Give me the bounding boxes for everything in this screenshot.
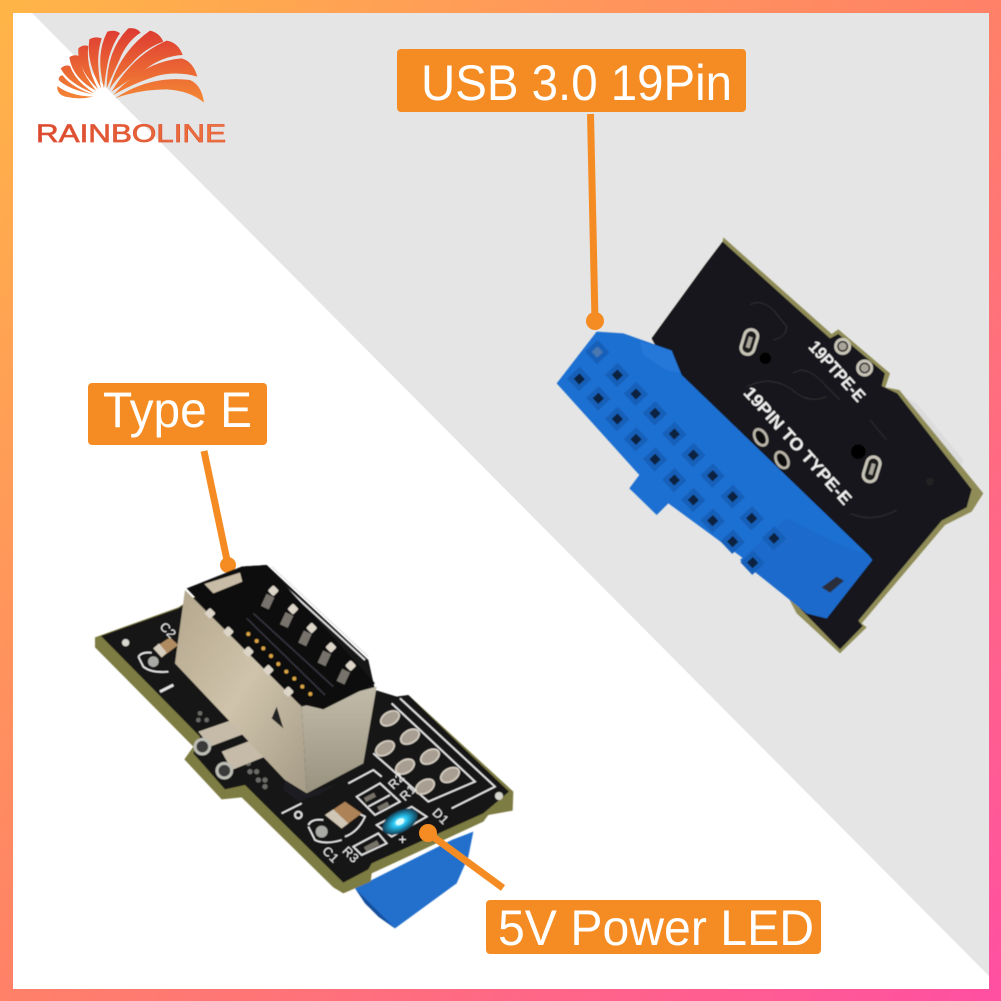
silkscreen labels: C2	[157, 620, 179, 641]
silkscreen labels: R3	[340, 844, 361, 866]
silkscreen labels: R2	[386, 770, 407, 792]
PCB rim	[95, 565, 513, 893]
label text: USB 3.0 19Pin	[421, 55, 732, 111]
beige top tab	[204, 573, 242, 593]
base of connector	[283, 780, 338, 802]
label box	[397, 49, 746, 112]
leader line	[204, 451, 228, 565]
leader line	[590, 114, 595, 321]
callout: USB 3.0 19Pin	[397, 49, 746, 330]
capacitor C1	[316, 802, 362, 838]
callout: Type E	[88, 382, 267, 573]
label box	[486, 900, 821, 954]
blue power LED	[378, 803, 422, 840]
silver solder pads	[373, 708, 462, 797]
silkscreen labels: D1	[430, 806, 451, 827]
silkscreen labels: C1	[320, 844, 341, 866]
label text: Type E	[103, 382, 252, 438]
leader dot	[220, 557, 236, 573]
gold contact pins	[246, 632, 312, 696]
photo: blue USB 3.0 19-pin header side of the adapter	[557, 237, 983, 653]
callout: 5V Power LED	[419, 824, 821, 956]
faint PCB traces	[747, 303, 897, 518]
leader line	[428, 833, 503, 888]
photo: Type E side of the adapter	[95, 565, 513, 928]
connector front shell	[302, 687, 377, 793]
connector shell notch	[272, 707, 283, 728]
capacitor C2	[148, 637, 178, 667]
small resistors	[364, 793, 389, 852]
silver pads	[739, 328, 882, 483]
board holes	[760, 353, 934, 486]
silkscreen text: 19PTPE-E	[805, 337, 870, 406]
leader dot	[586, 312, 604, 330]
keying slot	[822, 577, 844, 593]
PCB black face	[101, 565, 509, 883]
silkscreen lines	[138, 567, 495, 855]
connector left shell	[175, 590, 307, 793]
label text: 5V Power LED	[498, 900, 814, 956]
shell serration dots	[204, 585, 356, 697]
pin holes grid	[567, 340, 786, 575]
silkscreen labels: +	[398, 831, 407, 847]
label box	[88, 383, 267, 445]
blue header below board	[355, 832, 473, 928]
logo fan icon	[57, 28, 204, 103]
inner slot frame	[247, 613, 333, 695]
silkscreen text: 19PIN TO TYPE-E	[740, 383, 856, 509]
PCB black face	[652, 242, 972, 649]
PCB rim	[652, 237, 983, 653]
silver connector peeking behind board	[887, 387, 963, 473]
logo wordmark: RAINBOLINE	[36, 120, 226, 148]
inner gray tabs	[261, 594, 350, 685]
leader dot	[419, 824, 437, 842]
ring pad	[295, 812, 302, 818]
top latch ridge	[640, 342, 680, 373]
connector opening	[187, 565, 375, 709]
mounting holes	[122, 639, 503, 800]
silkscreen labels: R1	[397, 782, 419, 804]
header end face	[740, 518, 872, 618]
logo: Rainboline	[36, 28, 226, 148]
small chip pads near legs	[196, 711, 268, 789]
blue header body	[557, 332, 872, 618]
silkscreen labels	[157, 620, 451, 866]
connector mounting legs	[195, 717, 273, 778]
darker blue side	[355, 888, 395, 928]
partly hidden pads	[751, 427, 791, 470]
